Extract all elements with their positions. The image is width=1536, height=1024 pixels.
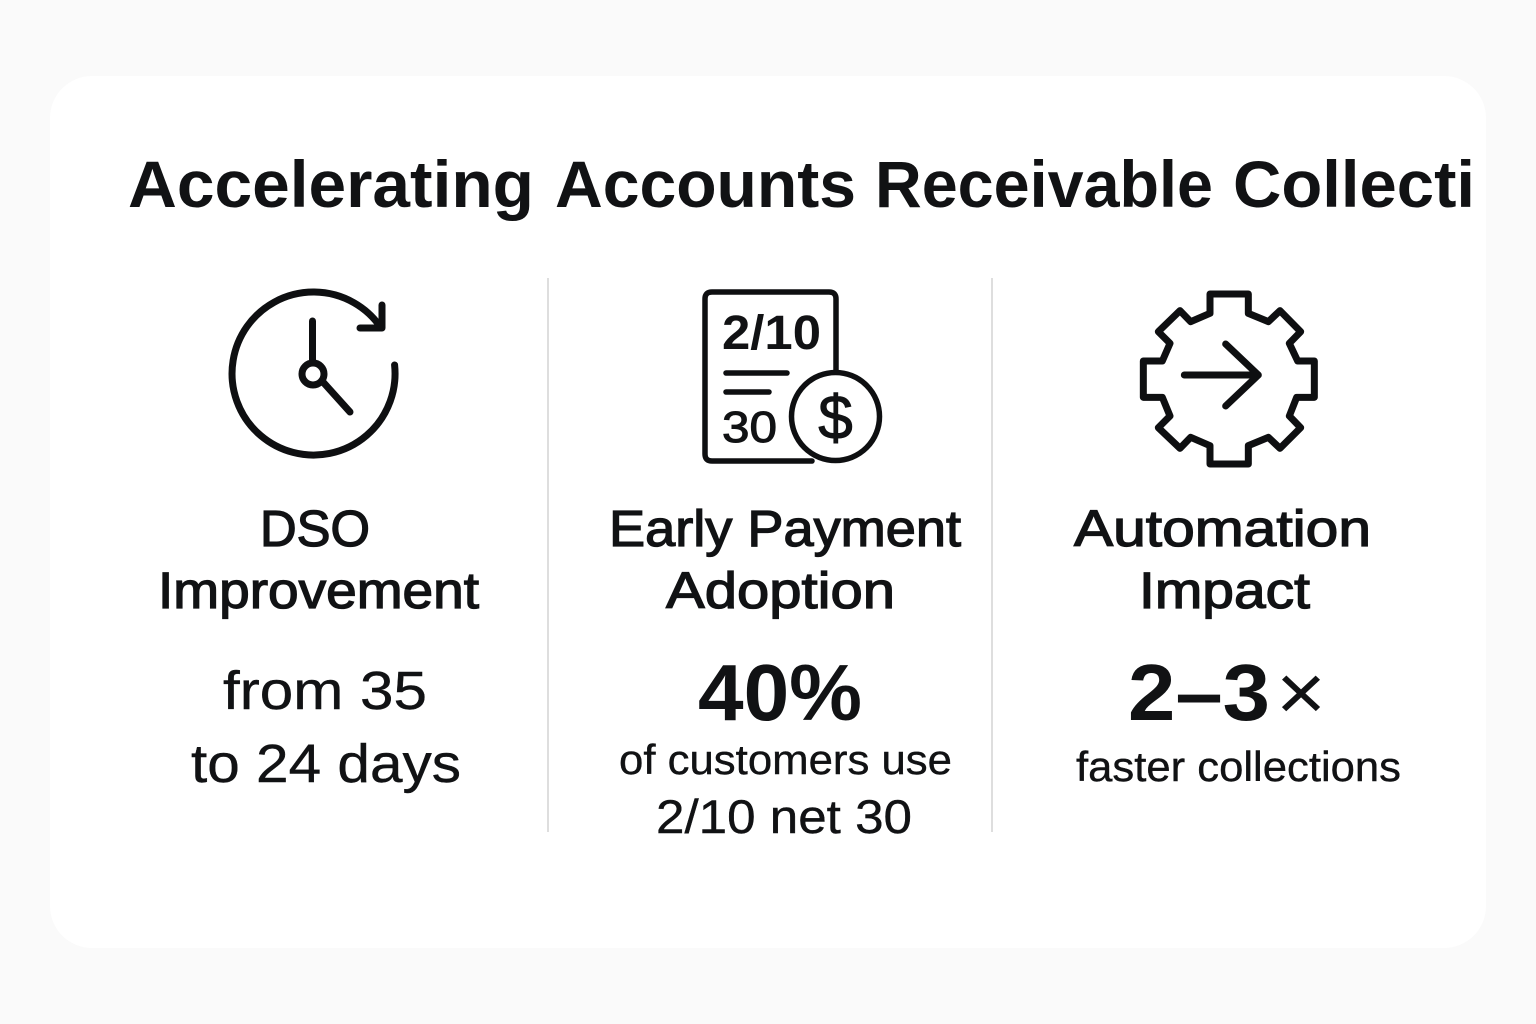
title: Accounts	[555, 147, 856, 221]
panel: automation impact	[1074, 294, 1401, 790]
heading: Automation Impact	[1074, 500, 1371, 619]
heading: Early Payment Adoption: Early Payment	[609, 500, 961, 557]
icon: invoice with dollar coin: $	[818, 384, 853, 453]
stat: from 35 to 24 days: from 35	[223, 661, 427, 721]
icon: clock with circular arrow	[232, 292, 395, 455]
heading: Early Payment Adoption	[609, 500, 961, 619]
stat: from 35 to 24 days	[191, 661, 461, 794]
heading: Early Payment Adoption: Adoption	[666, 562, 895, 619]
icon: invoice with dollar coin	[705, 292, 880, 461]
stat: 2–3×: 2–3	[1128, 648, 1270, 737]
caption: of customers use 2/10 net 30	[619, 736, 952, 843]
title: Receivable	[875, 147, 1213, 221]
icon: invoice with dollar coin: 2/10	[722, 307, 821, 360]
title: Accelerating	[128, 147, 534, 221]
title	[128, 147, 1475, 221]
stat: 2–3×	[1128, 648, 1326, 737]
icon: gear with arrow	[1143, 294, 1314, 464]
heading: DSO Improvement: DSO	[260, 500, 370, 557]
heading: DSO Improvement	[158, 500, 479, 619]
heading: DSO Improvement: Improvement	[158, 562, 479, 619]
heading: Automation Impact: Automation	[1074, 500, 1371, 557]
panel: early payment adoption	[609, 292, 961, 843]
stat: 40%: 40%	[698, 648, 862, 737]
panel: main card	[50, 76, 1486, 948]
icon: invoice with dollar coin: 30	[722, 403, 777, 452]
title: Collecti	[1233, 147, 1475, 221]
caption: of customers use 2/10 net 30: 2/10 net 30	[656, 790, 912, 843]
stat: from 35 to 24 days: to 24 days	[191, 734, 461, 794]
heading: Automation Impact: Impact	[1139, 562, 1310, 619]
caption: faster collections: faster collections	[1076, 743, 1401, 790]
stat: 2–3×: ×	[1276, 648, 1326, 737]
caption: of customers use 2/10 net 30: of customers use	[619, 736, 952, 783]
panel: DSO improvement	[158, 292, 479, 794]
